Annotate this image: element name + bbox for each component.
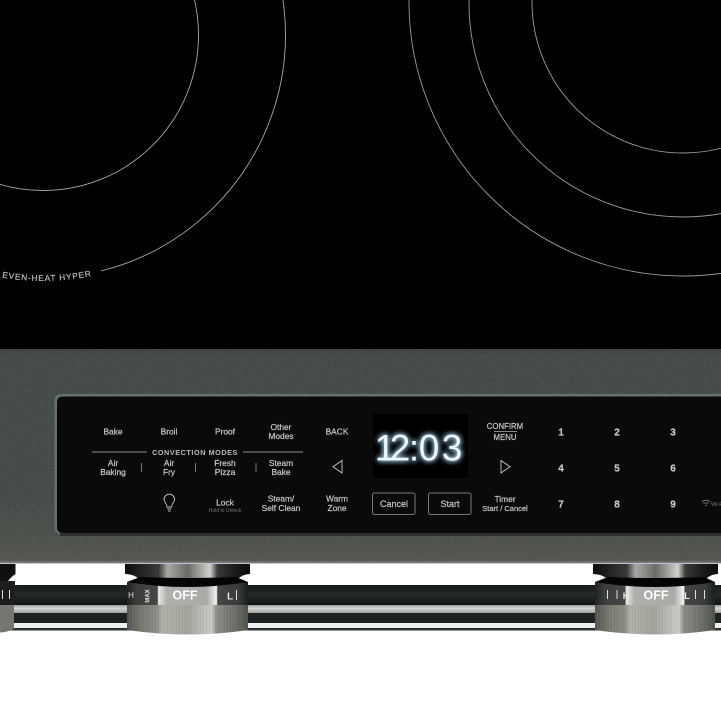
number keypad: 2 xyxy=(614,428,620,438)
knob black collar xyxy=(595,577,715,590)
confirm menu label: MENU xyxy=(494,433,517,442)
timer label: Timer xyxy=(494,494,516,504)
number keypad xyxy=(558,428,676,510)
clock display xyxy=(373,414,468,478)
bottom row functions: Self Clean xyxy=(262,503,301,513)
bottom row functions xyxy=(209,494,348,514)
number keypad: 3 xyxy=(670,428,676,438)
left burner rings xyxy=(0,0,285,271)
convection modes heading: CONVECTION MODES xyxy=(152,448,238,457)
bottom row functions: Zone xyxy=(327,503,347,513)
knob labels: L xyxy=(684,591,690,601)
convection mode buttons: Air xyxy=(164,458,174,468)
number keypad: 5 xyxy=(614,464,620,474)
top row modes: Modes xyxy=(268,431,294,441)
convection mode buttons: Fresh xyxy=(214,458,236,468)
cancel button: Cancel xyxy=(380,499,408,509)
knob labels: H xyxy=(623,591,629,601)
number keypad: 8 xyxy=(614,500,620,510)
convection mode buttons xyxy=(100,458,293,477)
confirm menu label xyxy=(487,422,523,442)
icon: back arrow xyxy=(333,460,342,473)
number keypad: 1 xyxy=(558,428,564,438)
cooktop surface xyxy=(0,0,721,349)
oven front panel xyxy=(0,349,721,564)
bottom row functions: Lock xyxy=(216,498,235,508)
knob labels: OFF xyxy=(172,588,198,602)
timer label: Start / Cancel xyxy=(482,504,528,513)
control labels xyxy=(92,422,721,514)
knob labels xyxy=(607,588,705,602)
burner label: even-heat hyper: EVEN-HEAT HYPER xyxy=(2,270,91,282)
timer label xyxy=(482,494,528,513)
convection mode buttons: Steam xyxy=(269,458,293,468)
knob labels: OFF xyxy=(644,588,669,602)
top row modes: Other xyxy=(271,422,292,432)
convection mode buttons: Baking xyxy=(100,467,126,477)
convection mode buttons: Bake xyxy=(271,467,291,477)
confirm menu label: CONFIRM xyxy=(487,422,523,431)
clock display: 12:03 xyxy=(375,428,462,468)
knob scale band xyxy=(127,582,248,605)
towel bar handle xyxy=(0,585,721,630)
knob labels: H xyxy=(128,591,134,600)
knob labels: MAX xyxy=(146,589,152,603)
knob neck xyxy=(593,564,718,579)
top row modes: BACK xyxy=(326,426,349,436)
right burner rings xyxy=(409,0,721,276)
knob labels xyxy=(128,588,237,603)
number keypad: 7 xyxy=(558,500,564,510)
left partial knob xyxy=(0,564,16,632)
center-left knob xyxy=(125,564,250,634)
bottom row functions: Steam/ xyxy=(268,494,295,504)
knob black collar xyxy=(127,577,248,590)
knob body xyxy=(595,605,715,634)
bottom row functions: Hold to Unlock xyxy=(209,508,242,514)
cancel button xyxy=(372,493,415,514)
number keypad: 9 xyxy=(670,500,676,510)
top row modes: Broil xyxy=(161,426,178,436)
knob neck xyxy=(125,564,250,579)
center-right knob xyxy=(593,564,718,634)
convection mode buttons: Pizza xyxy=(215,467,236,477)
top row modes: Proof xyxy=(215,426,236,436)
convection mode buttons: Air xyxy=(108,458,118,468)
number keypad: 4 xyxy=(558,464,564,474)
icon: forward arrow xyxy=(501,460,510,473)
top row modes: Bake xyxy=(103,426,123,436)
control panel xyxy=(54,394,721,536)
knob labels: L xyxy=(227,592,233,602)
wifi indicator xyxy=(702,500,721,508)
start button xyxy=(428,493,471,514)
convection mode buttons: Fry xyxy=(163,467,176,477)
knob scale band xyxy=(595,582,715,605)
icon: light bulb xyxy=(164,494,175,511)
start button: Start xyxy=(440,499,460,509)
top row modes xyxy=(103,422,349,441)
number keypad: 6 xyxy=(670,464,676,474)
bottom row functions: Warm xyxy=(326,494,348,504)
white background below the range xyxy=(0,563,721,721)
knob body xyxy=(127,605,248,634)
